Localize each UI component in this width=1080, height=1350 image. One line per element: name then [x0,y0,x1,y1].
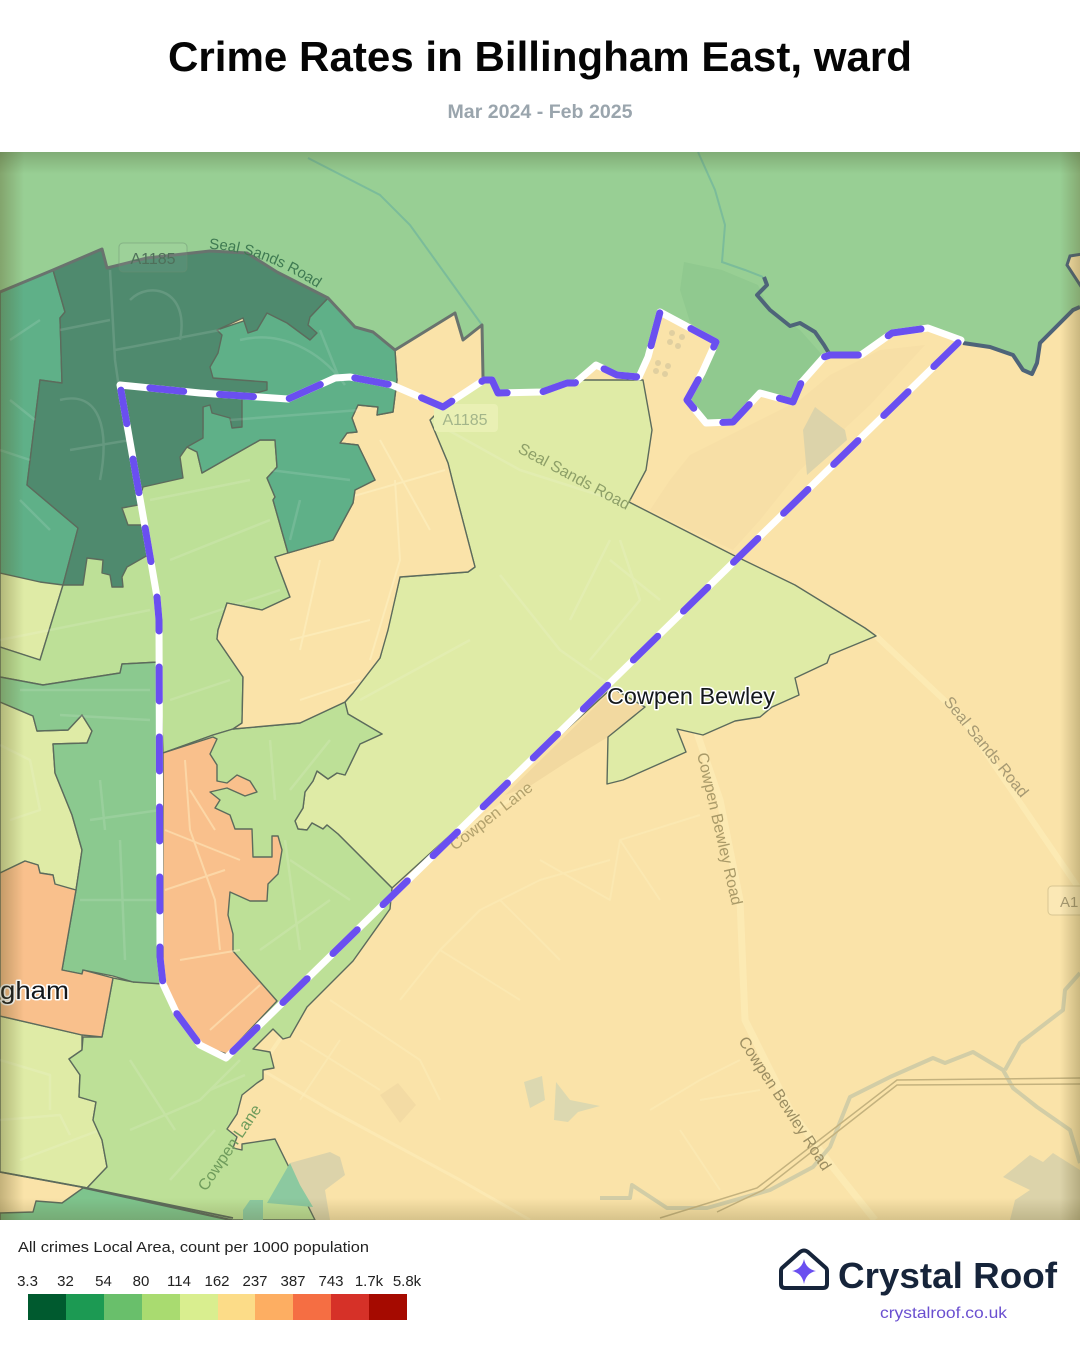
roads on peach area [245,635,1080,1220]
legend value labels: 3.3 [17,1273,38,1290]
ward boundary: white casing [120,312,961,1058]
road label box: A1185 central [434,404,498,432]
place label: Cowpen Bewley: Cowpen Bewley [607,683,776,709]
area: south orange [0,861,113,1037]
plots at north-east inlet [653,330,685,377]
area: dark green [27,249,328,587]
area: orange inside ward [163,737,282,1054]
road label: Seal Sands Road central: Seal Sands Road [515,441,633,514]
river loop north-east [1067,254,1080,288]
legend value labels: 32 [57,1273,74,1290]
title: Crime Rates in Billingham East, ward [168,33,912,80]
legend value labels: 387 [280,1273,306,1290]
road label: Cowpen Lane central: Cowpen Lane [447,779,536,854]
legend title: All crimes Local Area, count per 1000 population [18,1239,369,1256]
legend colour scale [28,1294,407,1320]
road label: Cowpen Lane south: Cowpen Lane [195,1102,265,1194]
road label: Seal Sands Road north: Seal Sands Road [210,238,322,288]
road label: Cowpen Bewley Road upper: Cowpen Bewley Road [693,751,745,907]
area: top light green estuary land [0,152,1080,390]
stream in green land [308,152,763,325]
river channels on peach area [600,973,1080,1208]
legend value labels: 5.8k [393,1273,422,1290]
legend value labels: 114 [167,1273,191,1290]
area: central peach [217,313,483,729]
river, dark [757,277,1080,374]
place label: Billingham (cropped): gham [0,977,69,1005]
legend [17,1239,422,1320]
lime green streets [0,480,350,1180]
area: medium green right [187,298,397,553]
area: central pale green [295,380,876,888]
legend value labels: 743 [318,1273,344,1290]
area: medium-light green west [0,662,163,984]
map base: peach area [0,309,1080,1220]
road label box: A1185 north: A1185 [130,251,176,268]
boundary line: south-west [0,1172,233,1218]
ward boundary: purple dashes [120,312,961,1058]
orange streets [165,760,260,1030]
legend value labels: 80 [133,1273,149,1290]
legend value labels: 54 [95,1273,112,1290]
map edge vignette [0,152,1080,1220]
darker woodland patch [724,271,766,301]
road label: Seal Sands Road east: Seal Sands Road [940,694,1031,801]
brand name: Crystal Roof [838,1255,1058,1296]
green area streets [0,270,360,540]
website: crystalroof.co.uk [880,1305,1008,1322]
peach area details: ponds and rough ground [290,345,1080,1220]
legend value labels: 1.7k [355,1273,384,1290]
map panel [0,152,1080,1220]
area: south-western pale green [0,1016,107,1188]
area: bottom medium green [0,1188,238,1222]
railway lines [660,1078,1080,1218]
road label box: A1185 central: A1185 [442,412,488,429]
road label: Cowpen Bewley Road lower: Cowpen Bewley Road [735,1034,834,1174]
legend value labels [17,1273,422,1290]
legend value labels: 237 [242,1273,268,1290]
central peach streets [290,440,445,700]
area: medium green left [0,270,78,585]
area: south-west central lime green [69,702,392,1220]
brand logo [781,1250,1058,1322]
area: north-west lime green [0,440,290,753]
pale green streets [0,420,660,1160]
top boundary line [0,249,483,377]
road label box: A1 east: A1 [1060,894,1078,911]
medium-light green streets [20,690,160,960]
area: western pale green [0,702,92,890]
green patches south [243,1163,313,1220]
road label box: A1 east [1048,886,1080,915]
icon: house with crystal [781,1250,827,1288]
road label box: A1185 north [119,243,187,272]
legend value labels: 162 [204,1273,230,1290]
date range subtitle: Mar 2024 - Feb 2025 [448,102,633,123]
area: upper-left pale green [0,574,62,660]
